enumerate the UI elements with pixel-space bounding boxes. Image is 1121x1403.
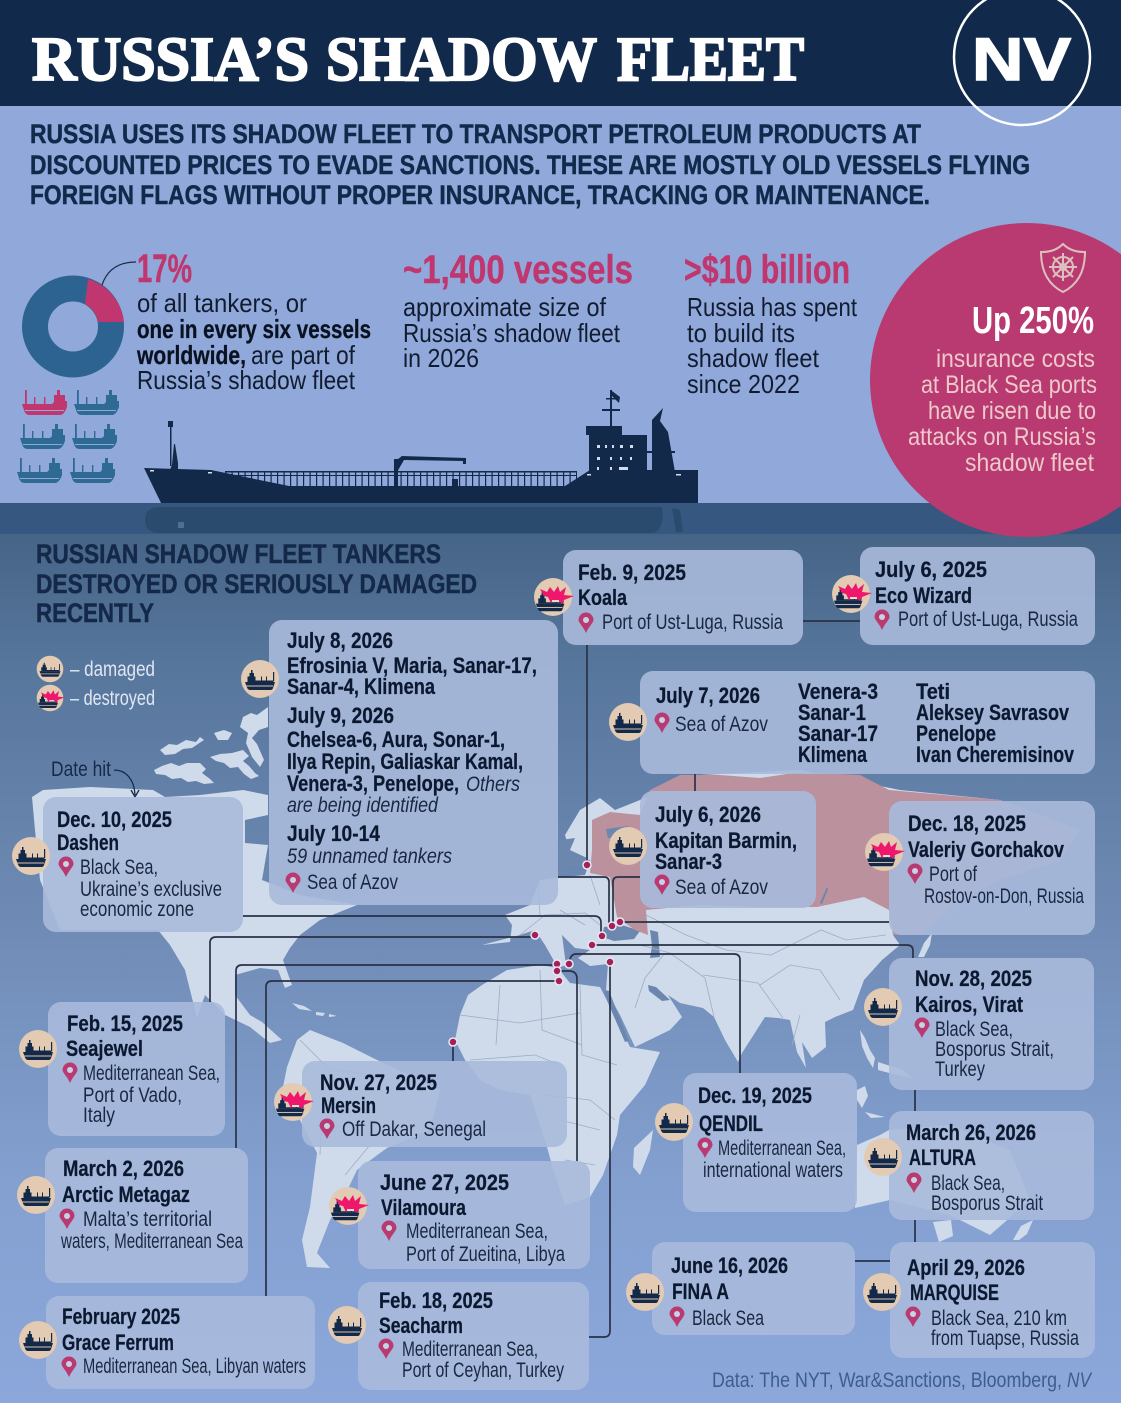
MARQUISE text: Black Sea, 210 km (931, 1307, 1067, 1330)
stat: 1,400 vessels: Russia’s shadow fleet (403, 318, 621, 348)
Mersin text (320, 1070, 486, 1141)
ALTURA text: Bosporus Strait (931, 1192, 1043, 1215)
North America (32, 787, 357, 1043)
callout text: have risen due to (928, 397, 1096, 425)
icons: six tankers, one in six highlighted (17, 390, 119, 483)
pin (62, 1062, 78, 1083)
Seajewel text: Seajewel (66, 1036, 143, 1061)
MARQUISE text (907, 1255, 1079, 1350)
Seacharm text: Port of Ceyhan, Turkey (402, 1359, 564, 1382)
Baltic Sea (558, 838, 587, 868)
Persian Gulf (648, 985, 670, 1001)
July 7 text: Ivan Cheremisinov (916, 742, 1075, 767)
callout text: insurance costs (936, 345, 1095, 373)
pin (670, 1306, 684, 1327)
pin (62, 1356, 76, 1377)
stat: 17%: Russia’s shadow fleet (137, 365, 356, 395)
panel: July 6 2026 (609, 791, 816, 908)
Seajewel text: Feb. 15, 2025 (67, 1011, 183, 1036)
icon: damaged tanker (19, 1321, 57, 1359)
Japan and Pacific islands (857, 933, 1033, 1242)
icon: damaged tanker (864, 1138, 902, 1176)
ALTURA text: ALTURA (909, 1145, 976, 1170)
pin (906, 1172, 922, 1193)
Seacharm text (379, 1288, 564, 1382)
MARQUISE text: MARQUISE (910, 1280, 999, 1305)
Koala text: Koala (578, 585, 628, 610)
Grace Ferrum text (62, 1304, 306, 1378)
Arctic Metagaz text: March 2, 2026 (63, 1156, 184, 1181)
Vilamoura text: Mediterranean Sea, (406, 1220, 548, 1243)
icon: destroyed tanker (329, 1187, 369, 1225)
Eco Wizard text: Eco Wizard (875, 583, 972, 608)
callout text (908, 345, 1097, 477)
MARQUISE text: from Tuapse, Russia (931, 1327, 1079, 1350)
panel: Eco Wizard (832, 547, 1095, 645)
stat: 1,400 vessels: approximate size of (403, 292, 607, 322)
Mersin text: Off Dakar, Senegal (342, 1118, 486, 1141)
source note: Data: The NYT, War&Sanctions, Bloomberg, (712, 1369, 1062, 1392)
Seacharm text: Seacharm (379, 1313, 463, 1338)
icon: destroyed tanker (534, 578, 574, 616)
Valeriy Gorchakov text: Dec. 18, 2025 (908, 811, 1026, 836)
ALTURA text: Black Sea, (931, 1172, 1005, 1195)
Kairos text: Bosporus Strait, (935, 1038, 1054, 1061)
July 7 text: Sanar-1 (798, 700, 866, 725)
icon: damaged tanker (655, 1103, 693, 1141)
title: FLEET (617, 26, 804, 94)
Russia (590, 772, 1080, 935)
pin (58, 856, 74, 877)
panel: Valeriy Gorchakov (865, 801, 1095, 935)
Kairos text: Black Sea, (935, 1018, 1013, 1041)
stat: 10 billion: since 2022 (687, 369, 800, 399)
Arctic islands (154, 707, 268, 906)
July 8-14 text: July 8, 2026 (287, 628, 393, 653)
title (32, 26, 804, 94)
pin (698, 1138, 712, 1158)
Koala text: Port of Ust-Luga, Russia (602, 611, 783, 634)
pin (908, 864, 922, 884)
icon: damaged tanker (863, 1273, 901, 1311)
July 8-14 text: are being identified (287, 794, 439, 817)
QENDIL text: Dec. 19, 2025 (698, 1083, 812, 1108)
Caspian Sea (650, 930, 660, 958)
FINA A text: FINA A (672, 1279, 729, 1304)
icon: damaged tanker (17, 1176, 55, 1214)
July 6 text (655, 802, 797, 899)
QENDIL text: international waters (703, 1159, 843, 1182)
underwater hull (145, 507, 683, 533)
FINA A text (671, 1253, 788, 1330)
section heading (36, 539, 477, 628)
July 7 text: Aleksey Savrasov (916, 700, 1070, 725)
panel: Vilamoura (329, 1161, 590, 1269)
panel: ALTURA (864, 1111, 1094, 1220)
stat: 1,400 vessels (403, 248, 633, 373)
July 7 text: July 7, 2026 (656, 683, 760, 708)
pin (914, 1018, 930, 1038)
Australia (855, 1125, 1030, 1235)
July 8-14 text: Ilya Repin, Galiaskar Kamal, (287, 749, 523, 774)
pin (60, 1208, 74, 1229)
legend (37, 656, 155, 711)
pin (320, 1118, 334, 1139)
Seajewel text: Mediterranean Sea, (83, 1062, 220, 1085)
connector lines (210, 621, 915, 1337)
icon: destroyed tanker (274, 1083, 314, 1121)
stat: 1,400 vessels: in 2026 (403, 343, 479, 373)
annotation: date hit: Date hit (51, 758, 111, 781)
July 8-14 text: Others (466, 773, 520, 796)
logo: NV: NV (972, 26, 1071, 93)
intro text: RUSSIA USES ITS SHADOW FLEET TO TRANSPORT PETROLEUM PRODUCTS AT (30, 119, 921, 149)
Mersin text: Nov. 27, 2025 (320, 1070, 437, 1095)
July 8-14 text: 59 unnamed tankers (287, 845, 452, 868)
Kairos text: Nov. 28, 2025 (915, 966, 1032, 991)
pin (906, 1306, 920, 1327)
Valeriy Gorchakov text: Valeriy Gorchakov (908, 837, 1065, 862)
July 6 text: Sanar-3 (655, 849, 722, 874)
Dashen text (57, 807, 222, 921)
Caribbean islands (292, 1003, 337, 1017)
icon: destroyed tanker (865, 833, 905, 871)
Koala text: Feb. 9, 2025 (578, 560, 686, 585)
pin (286, 872, 300, 893)
background: upper section (0, 0, 1121, 510)
Dashen text: Dashen (57, 830, 119, 855)
sea band (0, 503, 1121, 534)
Grace Ferrum text: Mediterranean Sea, Libyan waters (83, 1355, 306, 1378)
July 7 text: Klimena (798, 742, 868, 767)
pin (382, 1220, 396, 1241)
panel: Seajewel (19, 1002, 225, 1136)
icon: damaged tanker (864, 988, 902, 1026)
icon: shield with ship wheel (1041, 244, 1085, 292)
Eco Wizard text: July 6, 2025 (875, 557, 987, 582)
stat: 17%: are part of (251, 340, 356, 370)
Seajewel text: Italy (83, 1104, 115, 1127)
July 7 text: Penelope (916, 721, 996, 746)
panel: Koala (534, 550, 803, 645)
annotation: date hit (51, 758, 139, 797)
section heading: RUSSIAN SHADOW FLEET TANKERS (36, 539, 441, 569)
Kairos text (915, 966, 1054, 1081)
Vilamoura text (380, 1170, 565, 1266)
July 8-14 text: Sea of Azov (307, 871, 398, 894)
FINA A text: Black Sea (692, 1307, 764, 1330)
arrow: 17% to donut (102, 262, 136, 285)
Africa (455, 965, 660, 1205)
Valeriy Gorchakov text (908, 811, 1084, 908)
Arctic Metagaz text: waters, Mediterranean Sea (60, 1230, 243, 1253)
icon: damaged tanker (241, 660, 279, 698)
icon: damaged tanker (328, 1306, 366, 1344)
country borders (300, 875, 886, 1175)
callout text: at Black Sea ports (921, 371, 1097, 399)
panel: Seacharm (328, 1282, 589, 1390)
Dashen text: Ukraine’s exclusive (80, 878, 222, 901)
Grace Ferrum text: Grace Ferrum (62, 1330, 174, 1355)
FINA A text: June 16, 2026 (671, 1253, 788, 1278)
Arctic Metagaz text: Arctic Metagaz (62, 1182, 190, 1207)
intro text (30, 119, 1030, 210)
stat: 10 billion: >$10 billion (684, 248, 850, 292)
callout text: shadow fleet (965, 449, 1094, 477)
Vilamoura text: Port of Zueitina, Libya (406, 1243, 565, 1266)
White Sea (606, 826, 632, 838)
panel: FINA A (626, 1242, 855, 1335)
Black Sea (602, 925, 640, 941)
July 7 text: Sea of Azov (675, 713, 768, 736)
July 8-14 text: Venera-3, Penelope, (287, 771, 459, 796)
world map (32, 707, 1080, 1268)
Valeriy Gorchakov text: Port of (929, 863, 977, 886)
legend: – damaged (70, 658, 155, 681)
July 6 text: July 6, 2026 (655, 802, 761, 827)
Vilamoura text: June 27, 2025 (380, 1170, 509, 1195)
Madagascar (633, 1130, 653, 1175)
Mersin text: Mersin (321, 1093, 376, 1118)
ALTURA text: March 26, 2026 (906, 1120, 1036, 1145)
stat: 10 billion: to build its (687, 318, 795, 348)
stat: 17% (136, 247, 371, 395)
source note: NV (1067, 1369, 1093, 1392)
Eco Wizard text: Port of Ust-Luga, Russia (898, 608, 1078, 631)
QENDIL text: Mediterranean Sea, (718, 1137, 846, 1160)
stat: 17%: worldwide, (136, 340, 246, 370)
donut chart: 17% (35, 279, 124, 364)
panel: Mersin (274, 1061, 567, 1147)
Red Sea (605, 990, 629, 1042)
QENDIL text (698, 1083, 846, 1182)
panel: MARQUISE (863, 1242, 1095, 1358)
July 6 text: Kapitan Barmin, (655, 828, 797, 853)
Seajewel text (66, 1011, 220, 1127)
stat: 10 billion: shadow fleet (687, 343, 820, 373)
callout circle: insurance costs (870, 223, 1121, 537)
July 8-14 text: July 9, 2026 (287, 703, 394, 728)
Koala text (578, 560, 783, 634)
Arctic Metagaz text (60, 1156, 243, 1253)
icon: destroyed tanker (832, 575, 872, 613)
stat: 17%: one in every six vessels (137, 314, 371, 344)
July 8-14 text: July 10-14 (287, 821, 381, 846)
Seacharm text: Mediterranean Sea, (402, 1338, 538, 1361)
title: SHADOW (326, 26, 597, 94)
icon: damaged tanker (609, 827, 647, 865)
Kairos text: Kairos, Virat (915, 992, 1024, 1017)
tanker illustration (144, 390, 698, 505)
Eurasia (482, 770, 1080, 1068)
pin (578, 612, 594, 633)
Eco Wizard text (875, 557, 1078, 631)
stat: 10 billion (684, 248, 858, 399)
Seajewel text: Port of Vado, (83, 1084, 182, 1107)
MARQUISE text: April 29, 2026 (907, 1255, 1025, 1280)
icon: damaged tanker (12, 837, 50, 875)
icon: damaged tanker (609, 703, 647, 741)
panel: QENDIL (655, 1073, 857, 1212)
July 8-14 text: Chelsea-6, Aura, Sonar-1, (287, 727, 505, 752)
stat: 1,400 vessels: ~1,400 vessels (403, 248, 633, 292)
July 7 text: Venera-3 (798, 679, 878, 704)
pin (378, 1338, 394, 1359)
section heading: RECENTLY (36, 598, 154, 628)
panel: Arctic Metagaz (17, 1148, 248, 1283)
pin (654, 874, 670, 895)
panel: July 7 2026 (609, 671, 1095, 774)
Kairos text: Turkey (935, 1058, 985, 1081)
title: RUSSIA’S (32, 26, 309, 94)
icon: damaged tanker (19, 1030, 57, 1068)
Vilamoura text: Vilamoura (381, 1195, 467, 1220)
July 8-14 text (287, 628, 537, 894)
stat: 17%: 17% (137, 247, 192, 291)
QENDIL text: QENDIL (699, 1111, 763, 1136)
stat: 10 billion: Russia has spent (687, 292, 858, 322)
pin (654, 712, 670, 733)
July 8-14 text: Efrosinia V, Maria, Sanar-17, (287, 653, 537, 678)
header band (0, 0, 1121, 106)
stat: 17%: of all tankers, or (137, 288, 307, 318)
background: map section (0, 533, 1121, 1403)
Arctic Metagaz text: Malta’s territorial (83, 1208, 212, 1231)
section heading: DESTROYED OR SERIOUSLY DAMAGED (36, 569, 477, 599)
ALTURA text (906, 1120, 1043, 1215)
Dashen text: Black Sea, (80, 856, 158, 879)
location dots (449, 861, 624, 1046)
panel: Kairos, Virat (864, 958, 1094, 1090)
July 8-14 text: Sanar-4, Klimena (287, 674, 436, 699)
July 7 text: Sanar-17 (798, 721, 878, 746)
pin (874, 610, 890, 630)
logo: NV (954, 0, 1090, 125)
Grace Ferrum text: February 2025 (62, 1304, 180, 1329)
July 6 text: Sea of Azov (675, 876, 768, 899)
Lake Baikal (820, 887, 828, 904)
Seacharm text: Feb. 18, 2025 (379, 1288, 493, 1313)
intro text: FOREIGN FLAGS WITHOUT PROPER INSURANCE, TRACKING OR MAINTENANCE. (30, 180, 930, 210)
panel: Dashen (12, 797, 243, 932)
July 7 text: Teti (916, 679, 950, 704)
panel: July 8-14 2026 attacks (241, 620, 558, 905)
legend: – destroyed (70, 687, 155, 710)
South America (283, 1030, 440, 1268)
panel: Grace Ferrum (19, 1296, 315, 1389)
Dashen text: Dec. 10, 2025 (57, 807, 172, 832)
icon: damaged tanker (626, 1273, 664, 1311)
Dashen text: economic zone (80, 898, 194, 921)
July 7 text (656, 679, 1075, 767)
callout text: attacks on Russia’s (908, 423, 1096, 451)
